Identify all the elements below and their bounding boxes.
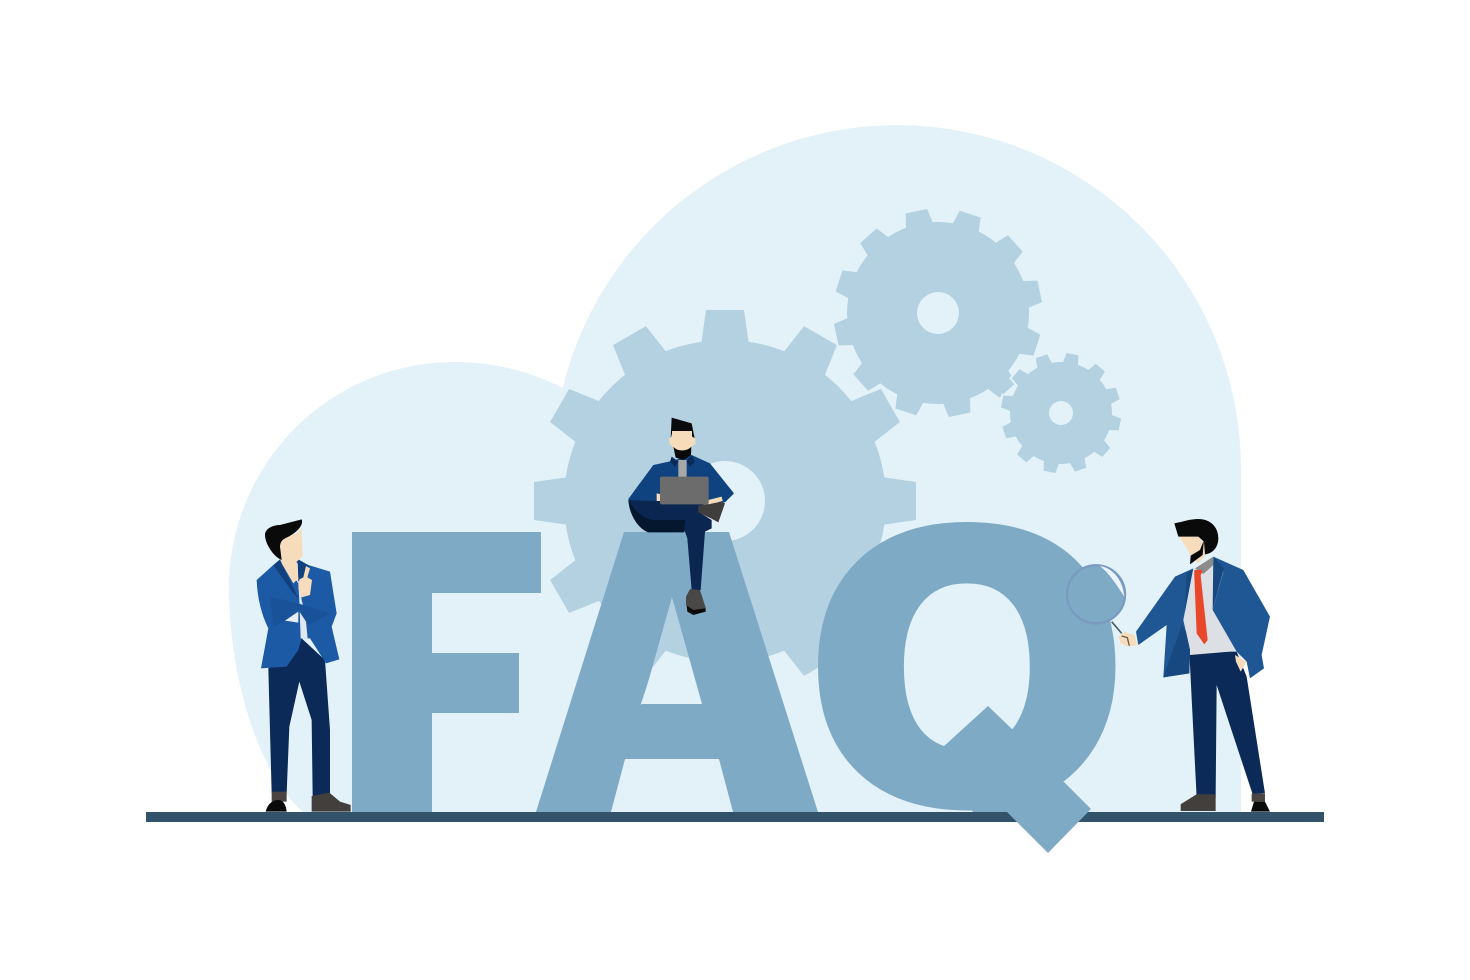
- hand in pocket: [1235, 655, 1247, 672]
- shirt: [1183, 560, 1237, 655]
- hair: [265, 519, 302, 560]
- jacket body and arm: [1136, 557, 1270, 678]
- raised hand: [298, 566, 312, 597]
- medium gear: [815, 190, 1061, 436]
- figure: man thinking, left: [257, 519, 351, 812]
- FAQ heading letters: [352, 522, 1116, 853]
- tie: [1194, 570, 1208, 644]
- background: pale blue cloud shape: [229, 125, 1241, 812]
- ground line: [146, 812, 1324, 822]
- hair: [1174, 519, 1218, 554]
- hand: [1118, 632, 1137, 647]
- figure: man sitting with laptop, centre: [628, 418, 734, 615]
- shoes: [266, 792, 351, 812]
- collar: [670, 455, 695, 467]
- jacket inner shade: [1163, 557, 1224, 677]
- FAQ heading letters: F: [317, 456, 572, 903]
- lapels: [273, 559, 309, 598]
- neck and face: [280, 528, 303, 583]
- hair: [671, 418, 695, 438]
- cuff: [285, 612, 298, 623]
- trousers: [1189, 652, 1265, 798]
- jacket: [628, 455, 734, 505]
- collar: [1195, 557, 1213, 574]
- beard: [1190, 540, 1204, 564]
- lower shoe: [686, 589, 706, 615]
- shoes: [1181, 794, 1270, 812]
- raised shoe: [698, 502, 725, 522]
- hands: [657, 493, 723, 504]
- jacket: [257, 559, 339, 668]
- dark thigh: [628, 500, 685, 532]
- shirt: [678, 460, 687, 477]
- face: [669, 431, 695, 454]
- FAQ heading letters: A: [534, 455, 821, 903]
- neck and face: [1179, 537, 1206, 563]
- figure: man with magnifying glass, right: [1067, 519, 1270, 812]
- FAQ heading letters: Q: [805, 460, 1129, 887]
- large gear: [534, 310, 916, 692]
- legs: [628, 500, 712, 590]
- laptop: [660, 477, 709, 504]
- small gear: [991, 343, 1131, 483]
- beard: [673, 447, 691, 460]
- magnifying glass: [1067, 565, 1125, 633]
- shirt: [285, 563, 308, 638]
- trousers: [268, 638, 330, 797]
- folded forearm: [270, 597, 330, 627]
